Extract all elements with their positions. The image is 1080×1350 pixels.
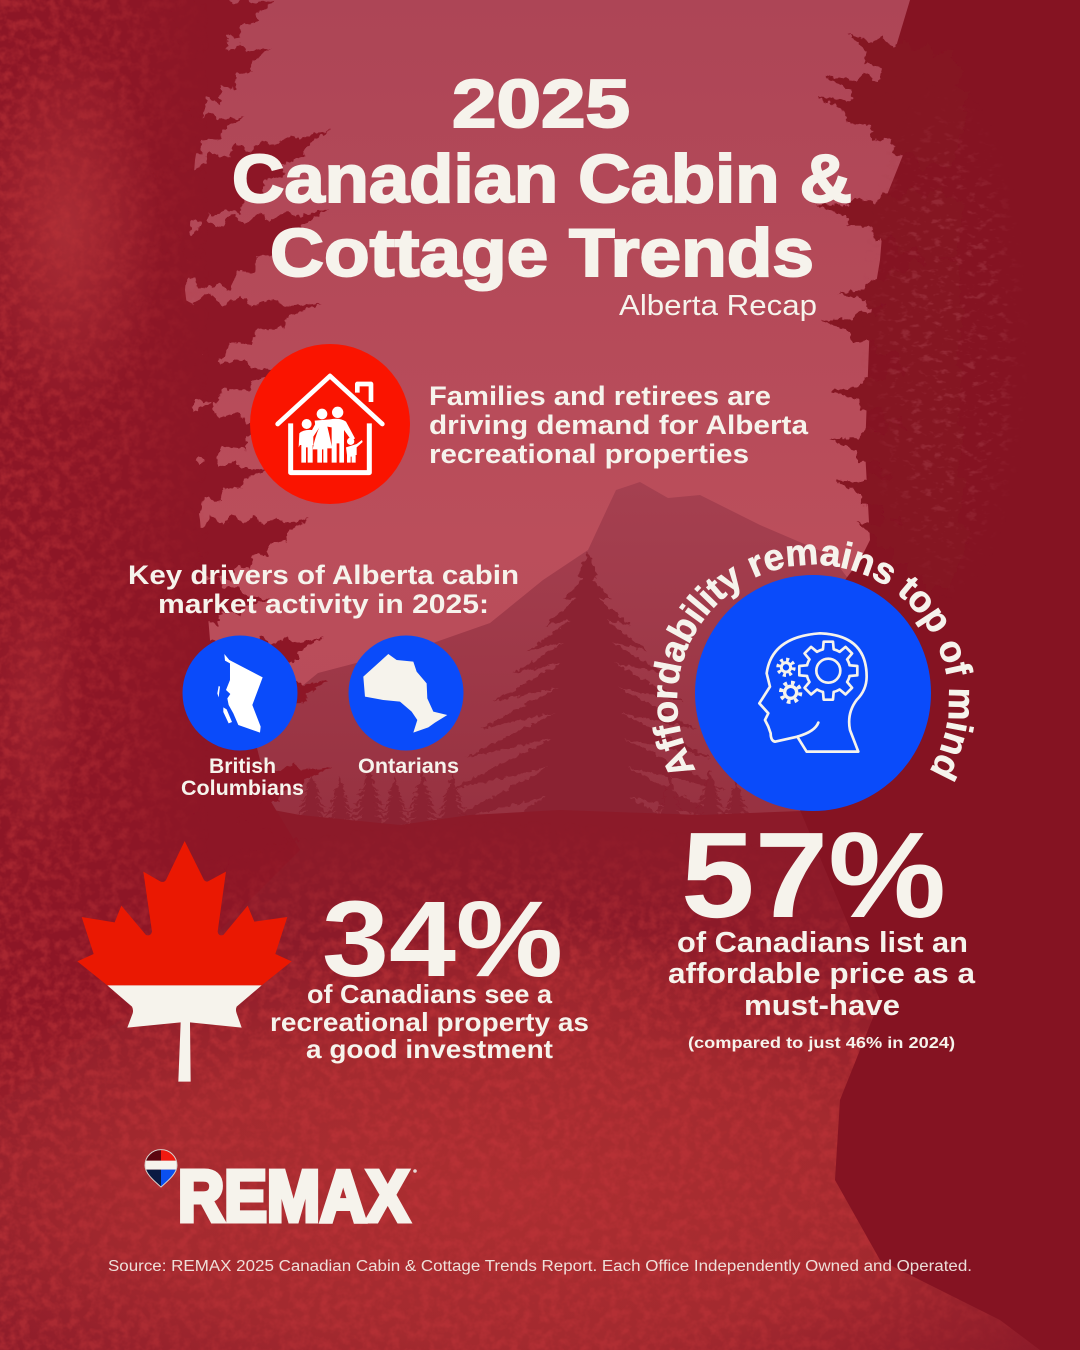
text: families and retirees: recreational properties (429, 439, 749, 469)
text: good investment: of Canadians see a (307, 979, 553, 1009)
text: must-have: of Canadians list an (677, 927, 968, 959)
title: Cottage Trends (270, 215, 814, 291)
right tree mass (800, 0, 1080, 1350)
icon: maple leaf (77, 841, 292, 1082)
label: British Columbians: Columbians (181, 777, 304, 800)
logo: REMAX: REMAX (178, 1157, 409, 1237)
heading: key drivers (128, 560, 519, 619)
text: good investment: recreational property as (270, 1007, 589, 1037)
heading: key drivers: market activity in 2025: (158, 589, 489, 619)
logo: REMAX (144, 1149, 417, 1224)
subtitle: Alberta Recap (619, 290, 817, 322)
text: good investment: a good investment (306, 1034, 553, 1064)
text: must-have: affordable price as a (668, 958, 976, 990)
left tree mass (0, 0, 346, 1100)
icon: British Columbia map (182, 636, 298, 750)
text: families and retirees (429, 381, 809, 469)
label: British Columbians: British (209, 755, 276, 778)
stat: 34%: 34% (322, 878, 563, 999)
text: good investment (270, 979, 589, 1064)
label: Ontarians: Ontarians (358, 755, 459, 778)
text: families and retirees: driving demand for Alberta (429, 410, 809, 440)
text: must-have: must-have (744, 990, 900, 1022)
text: families and retirees: Families and retirees are (429, 381, 771, 411)
icon: Ontario map (348, 636, 464, 750)
text: must-have (668, 927, 976, 1022)
title: Canadian Cabin & (232, 141, 852, 217)
note: comparison: (compared to just 46% in 2024) (688, 1035, 955, 1052)
icon: head with gears (695, 575, 931, 811)
title: 2025 (452, 66, 630, 142)
source footnote: Source: REMAX 2025 Canadian Cabin & Cottage Trends Report. Each Office Independently Owned and Operated. (108, 1258, 972, 1275)
icon: family in house (250, 344, 410, 504)
label: British Columbians (181, 755, 304, 800)
curved heading: affordability: Affordability remains top of mind (652, 541, 974, 782)
title (232, 66, 852, 291)
heading: key drivers: Key drivers of Alberta cabin (128, 560, 519, 590)
stat: 57%: 57% (681, 807, 946, 943)
